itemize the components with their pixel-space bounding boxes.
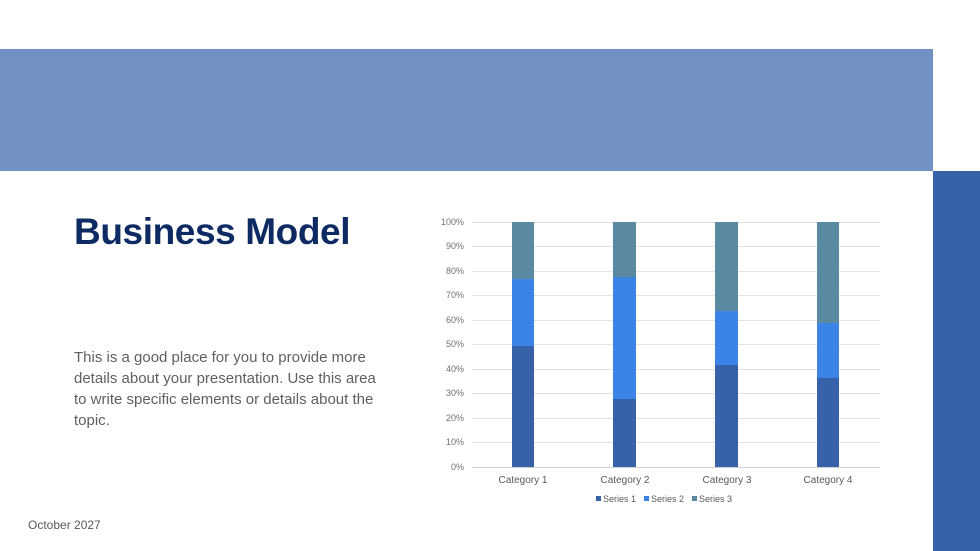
y axis labels: 60% [446,315,464,325]
y axis labels: 80% [446,266,464,276]
y axis labels: 0% [451,462,464,472]
date: October 2027 [28,518,101,532]
legend: Series 2 [651,494,684,504]
y axis labels [441,217,464,472]
y axis labels: 90% [446,241,464,251]
category labels: Category 3 [703,475,752,486]
y axis labels: 100% [441,217,464,227]
category labels: Category 2 [601,475,650,486]
category labels [499,475,853,486]
right accent bar [933,171,980,551]
y axis labels: 40% [446,364,464,374]
y axis labels: 50% [446,339,464,349]
top band [0,49,933,171]
y axis labels: 70% [446,290,464,300]
y axis labels: 10% [446,437,464,447]
legend: Series 1 [603,494,636,504]
legend [596,494,732,504]
category labels: Category 4 [804,475,853,486]
y axis labels: 30% [446,388,464,398]
body text: This is a good place for you to provide more details about your presentation. Use this area to write specific elements or details about the topic. [74,349,376,429]
title: Business Model [74,211,350,252]
bars [512,222,839,467]
legend: Series 3 [699,494,732,504]
category labels: Category 1 [499,475,548,486]
y axis labels: 20% [446,413,464,423]
